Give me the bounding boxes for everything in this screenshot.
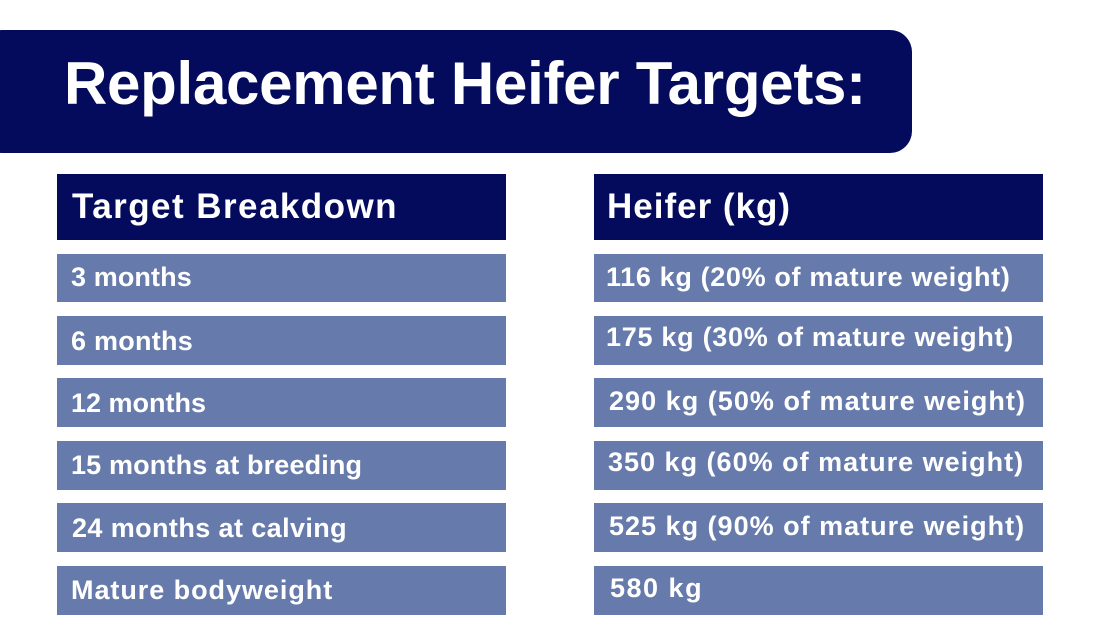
title banner <box>0 30 912 153</box>
row value: 116 kg <box>594 254 1043 302</box>
row value: 290 kg <box>594 378 1043 427</box>
row label: 24 months at calving: 24 months at calving <box>72 513 347 543</box>
row label: 15 months at breeding <box>57 441 506 490</box>
row value: 175 kg <box>594 316 1043 365</box>
row label: 12 months <box>57 378 506 427</box>
row value: 580 kg <box>594 566 1043 615</box>
row label: 6 months: 6 months <box>71 326 193 356</box>
row label: 3 months: 3 months <box>71 262 192 292</box>
row label: 12 months: 12 months <box>71 388 206 418</box>
row label: 6 months <box>57 316 506 365</box>
row value: 580 kg: 580 kg <box>610 573 703 603</box>
row value: 525 kg <box>594 503 1043 552</box>
row label: 24 months at calving <box>57 503 506 552</box>
row value: 350 kg <box>594 441 1043 490</box>
row label: Mature bodyweight <box>57 566 506 615</box>
row label: 3 months <box>57 254 506 302</box>
row value: 116 kg: 116 kg (20% of mature weight) <box>606 262 1010 292</box>
row value: 350 kg: 350 kg (60% of mature weight) <box>608 447 1024 477</box>
column header: Target Breakdown: Target Breakdown <box>72 187 398 226</box>
column header: Target Breakdown <box>57 174 506 240</box>
row value: 525 kg: 525 kg (90% of mature weight) <box>609 511 1025 541</box>
title: Replacement Heifer Targets: <box>64 50 866 117</box>
row value: 290 kg: 290 kg (50% of mature weight) <box>609 386 1026 416</box>
column header: Heifer (kg) <box>594 174 1043 240</box>
row label: 15 months at breeding: 15 months at breeding <box>71 450 362 480</box>
row value: 175 kg: 175 kg (30% of mature weight) <box>606 322 1014 352</box>
column header: Heifer (kg): Heifer (kg) <box>607 187 791 226</box>
row label: Mature bodyweight: Mature bodyweight <box>71 575 333 605</box>
